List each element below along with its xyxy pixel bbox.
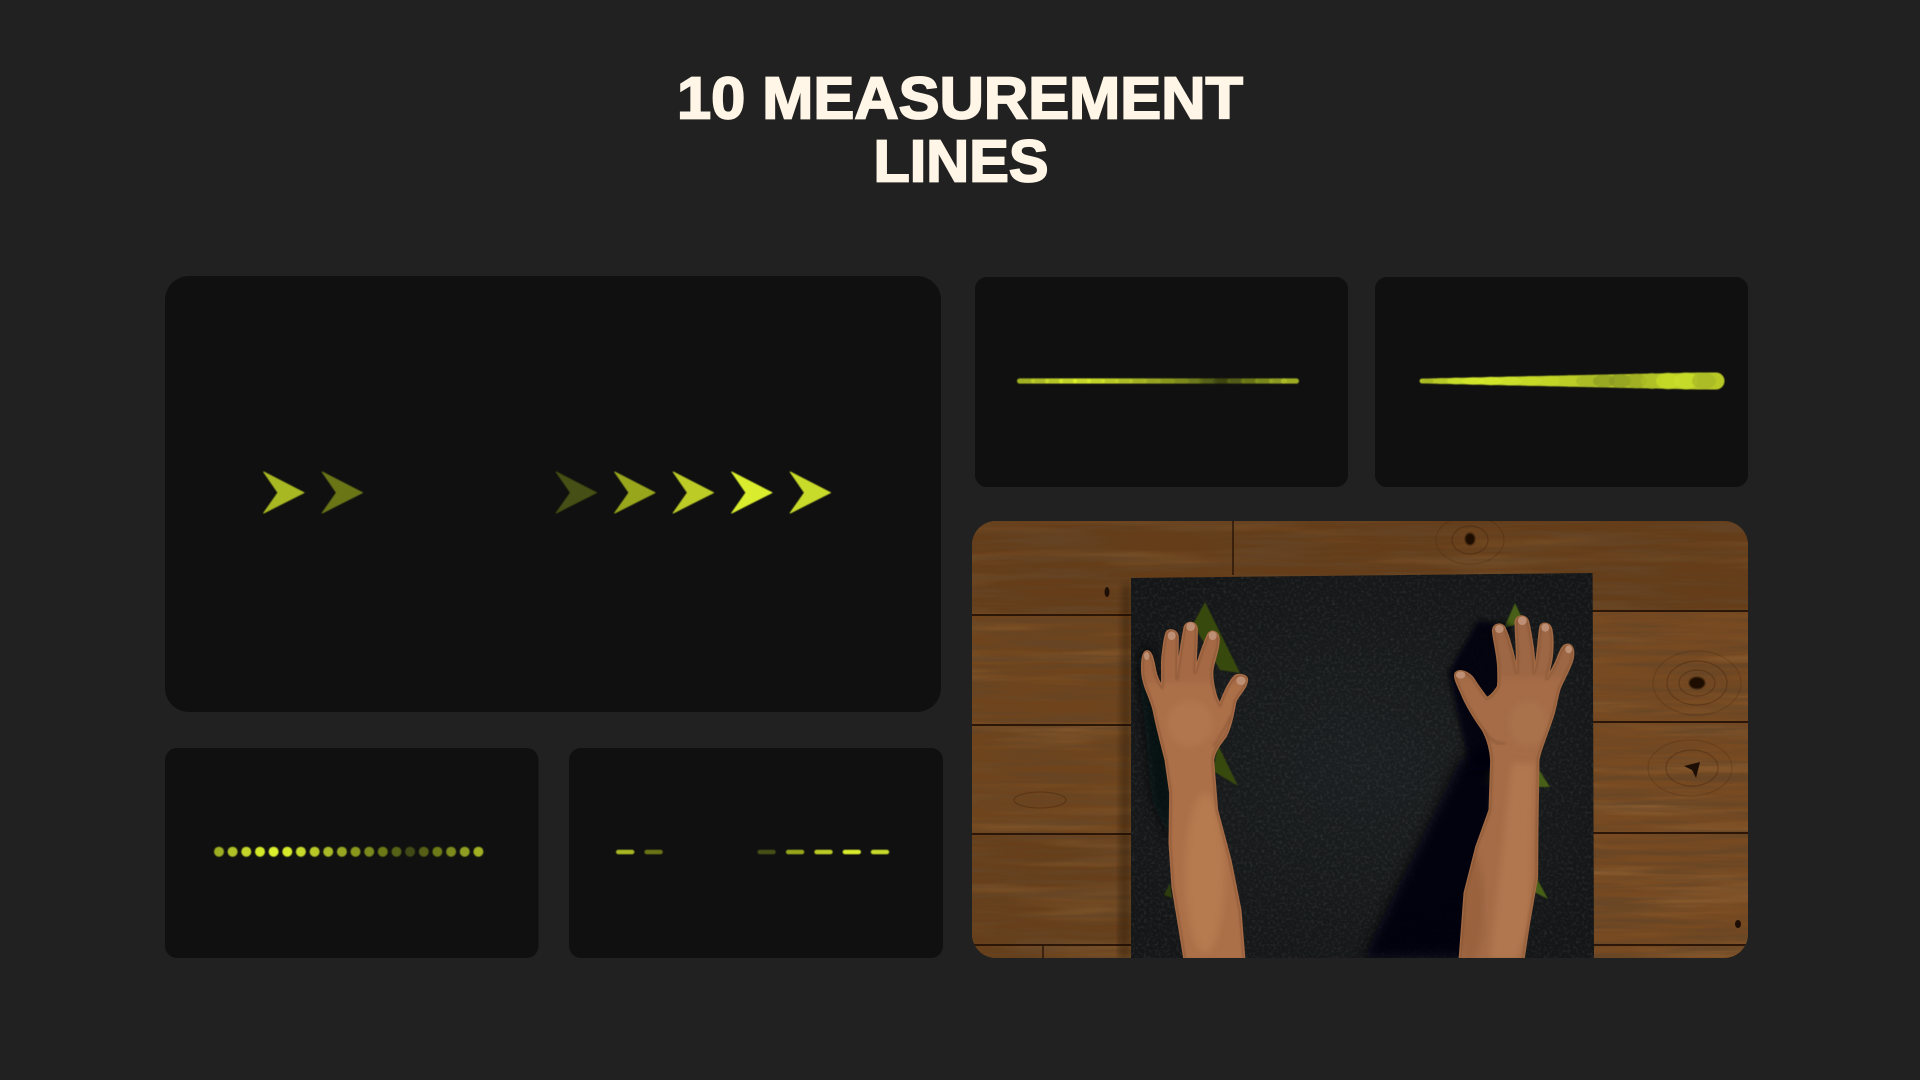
measurement line: dashes [616, 850, 889, 854]
back of hand highlight [1167, 700, 1213, 747]
measurement line: solid thin [1017, 378, 1299, 384]
title [677, 65, 1243, 194]
fingernails right [1456, 616, 1572, 679]
wood knots [1014, 516, 1741, 808]
title: LINES [874, 128, 1048, 194]
arrow group: first pair [264, 472, 362, 513]
mat triangle markers [1164, 602, 1550, 899]
yoga mat [1131, 573, 1594, 958]
panel: dashed line [569, 748, 943, 958]
mat shadow [1118, 584, 1131, 958]
fingers darker [1453, 617, 1573, 677]
panel: thin line [975, 277, 1348, 487]
panel: arrows [165, 276, 941, 712]
fingers darker [1140, 620, 1250, 683]
forearm highlight [1188, 798, 1222, 948]
plank seams [972, 521, 1748, 958]
measurement line: tapered [1420, 372, 1724, 390]
forearm highlight [1493, 766, 1533, 958]
panel: dotted line [165, 748, 538, 958]
left arm and hand [1140, 620, 1250, 960]
right arm and hand [1453, 616, 1573, 963]
fingernails left [1144, 622, 1246, 685]
arrow group: second set [556, 472, 830, 513]
photo: hands on yoga mat on wooden floor [972, 516, 1748, 963]
title: 10 MEASUREMENT [677, 65, 1243, 131]
back of hand highlight [1508, 700, 1548, 747]
hand shadows [1138, 620, 1510, 958]
measurement line: dots [214, 847, 483, 857]
panel: tapered line [1375, 277, 1748, 487]
wooden floor [972, 516, 1748, 958]
